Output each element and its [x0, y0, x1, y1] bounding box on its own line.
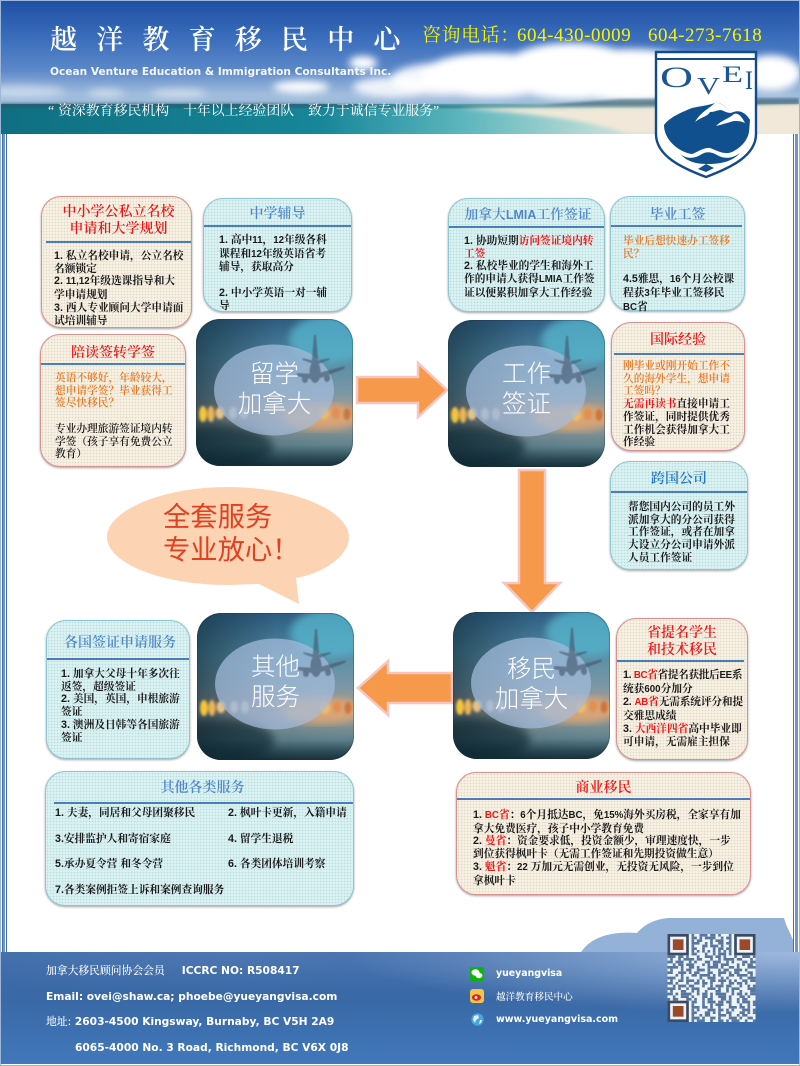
text: 证以便累积加拿大工作经验	[464, 287, 592, 299]
text: 2. 美国，英国，申根旅游	[61, 693, 180, 705]
company name: 越洋教育移民中心	[50, 25, 420, 55]
slogan: 致力于诚信专业服务”	[308, 104, 439, 119]
text: 教育）	[55, 448, 87, 460]
membership line: 加拿大移民顾问协会会员 ICCRC NO: R508417	[46, 963, 300, 978]
text: 3. 大西洋四省高中毕业即	[623, 723, 742, 735]
heading: 国际经验	[650, 333, 706, 348]
panel: provincial nominee	[616, 618, 748, 760]
text: 2. AB省无需系统评分和提	[623, 696, 743, 708]
heading: 中学辅导	[250, 207, 306, 222]
text: 6. 各类团体培训考察	[228, 858, 325, 870]
heading: 各国签证申请服务	[64, 636, 176, 651]
photo tile: other services: 其他	[251, 654, 300, 681]
logo shield: V	[697, 74, 721, 100]
text: 工作机会获得加拿大工	[623, 424, 730, 436]
text: 3. 魁省：22 万加元无需创业，无投资无风险，一步到位	[473, 861, 734, 873]
logo shield: E	[722, 62, 743, 87]
website: www.yueyangvisa.com	[496, 1014, 618, 1025]
panel: accompany visa	[40, 334, 186, 467]
text: 2. 曼省：资金要求低，投资金额少，审理速度快，一步	[473, 835, 731, 847]
header banner	[1, 1, 799, 134]
address 2: 6065-4000 No. 3 Road, Richmond, BC V6X 0J8	[75, 1041, 348, 1054]
phone numbers: 604-430-0009	[517, 25, 631, 46]
text	[54, 250, 184, 327]
text	[464, 234, 595, 299]
panel: international experience	[611, 322, 745, 451]
text: 2. 中小学英语一对一辅	[219, 287, 327, 299]
photo tile: work visa: 工作	[502, 361, 551, 388]
text: 1. 协助短期访问签证境内转	[464, 235, 593, 247]
text: 人员工作签证	[628, 552, 692, 564]
text: 专业办理旅游签证境内转	[55, 423, 173, 435]
photo tile: immigrate to Canada: 移民	[507, 656, 556, 683]
text: 课程和12年级英语省考	[219, 248, 326, 260]
icon: weibo	[470, 989, 484, 1003]
text: 可申请，无需雇主担保	[623, 736, 730, 748]
text: 拿大免费医疗，孩子中小学教育免费	[473, 823, 644, 835]
text: 英语不够好，年龄较大，	[55, 372, 173, 384]
text: 4. 留学生退税	[228, 833, 293, 845]
text: 民？	[623, 248, 644, 260]
text: 2. 枫叶卡更新，入籍申请	[228, 807, 347, 819]
text: 程获3年毕业工签移民	[623, 287, 725, 299]
text: 4.5雅思，16个月公校课	[623, 273, 734, 285]
heading: 和技术移民	[647, 643, 717, 658]
panel: graduate work permit	[610, 196, 745, 311]
text: 签尽快移民？	[55, 397, 119, 409]
logo shield: O	[660, 61, 693, 94]
text: BC省	[623, 301, 648, 313]
panel: business immigration	[456, 772, 751, 895]
photo tile: study in Canada	[196, 319, 353, 466]
arrow: left	[356, 658, 453, 718]
text: 统获600分加分	[623, 683, 693, 695]
text: 7.各类案例拒签上诉和案例查询服务	[55, 884, 224, 896]
text: 名额锁定	[54, 263, 97, 275]
text	[623, 360, 730, 448]
footer cloud	[581, 918, 793, 952]
photo tile: other services	[197, 613, 354, 760]
speech bubble	[107, 487, 349, 604]
photo tile: study in Canada: 留学	[250, 361, 299, 388]
photo tile: immigrate to Canada	[453, 612, 610, 759]
heading	[647, 624, 717, 658]
photo tile: work visa: 签证	[502, 391, 551, 418]
panel: school applications	[41, 196, 192, 328]
text: 试培训辅导	[54, 315, 107, 327]
panel: LMIA work visa	[448, 198, 605, 312]
text: 返签，超级签证	[61, 681, 136, 693]
text	[623, 234, 734, 313]
logo shield	[654, 50, 758, 178]
text: 工签	[464, 248, 485, 260]
address 1: 地址: 2603-4500 Kingsway, Burnaby, BC V5H 2A9	[46, 1014, 334, 1029]
slogan: 十年以上经验团队	[183, 104, 294, 119]
text: 到位获得枫叶卡（无需工作签证和先期投资做生意）	[473, 848, 719, 860]
text: 交雅思成绩	[623, 710, 676, 722]
text: 1. 加拿大父母十年多次往	[61, 668, 180, 680]
text: 签证	[61, 732, 82, 744]
wechat id: yueyangvisa	[496, 968, 562, 979]
heading: 毕业工签	[650, 208, 706, 223]
text: 作的申请人获得LMIA工作签	[464, 273, 595, 285]
photo tile: immigrate to Canada: 加拿大	[495, 686, 568, 713]
text: 3.安排监护人和寄宿家庭	[55, 833, 171, 845]
text: 毕业后想快速办工签移	[623, 235, 730, 247]
callout text: 专业放心！	[163, 534, 299, 565]
photo tile: work visa	[448, 320, 605, 467]
text	[55, 806, 224, 896]
banner photo: sky and beach	[1, 1, 799, 134]
text: 2. 私校毕业的学生和海外工	[464, 260, 593, 272]
text: 学签（孩子享有免费公立	[55, 436, 173, 448]
text: 1. BC省省提名获批后EE系	[623, 669, 742, 681]
phone numbers: 咨询电话：	[422, 25, 520, 46]
heading: 跨国公司	[651, 472, 707, 487]
text: 1. 高中11，12年级各科	[219, 234, 327, 246]
text: 1. 私立名校申请，公立名校	[54, 250, 183, 262]
heading: 加拿大LMIA工作签证	[464, 207, 592, 222]
panel: secondary tutoring	[203, 198, 352, 312]
email: Email: ovei@shaw.ca; phoebe@yueyangvisa.com	[46, 990, 337, 1003]
text: 学申请规划	[54, 289, 107, 301]
icon: wechat	[470, 967, 484, 981]
heading: 中小学公私立名校	[62, 205, 174, 220]
text: 签证	[61, 706, 82, 718]
photo tile: study in Canada: 加拿大	[238, 391, 311, 418]
arrow: right	[356, 360, 448, 420]
English company name: Ocean Venture Education & Immigration Consultants Inc.	[50, 66, 391, 78]
text	[228, 806, 347, 870]
text: 3. 澳洲及日韩等各国旅游	[61, 719, 180, 731]
text: 久的海外学生，想申请	[623, 373, 730, 385]
slogan	[48, 103, 439, 119]
text	[473, 808, 741, 887]
text: 3. 西人专业顾问大学申请面	[54, 302, 183, 314]
text: 作签证，同时提供优秀	[623, 411, 730, 423]
heading: 其他各类服务	[160, 781, 244, 796]
text: 2. 11,12年级选课指导和大	[54, 275, 175, 287]
heading: 陪读签转学签	[71, 346, 155, 361]
slogan: “	[48, 104, 54, 119]
text: 大设立分公司申请外派	[628, 539, 735, 551]
panel: multinational company	[610, 461, 748, 570]
text: 工签吗？	[623, 385, 666, 397]
text: 帮您国内公司的员工外	[628, 501, 735, 513]
text: 导	[219, 300, 230, 312]
text	[628, 500, 735, 564]
text	[219, 234, 327, 312]
callout text: 全套服务	[163, 501, 272, 532]
icon: globe	[471, 1013, 484, 1026]
text: 1. BC省：6个月抵达BC，免15%海外买房税，全家享有加	[473, 809, 741, 821]
panel: visa services	[46, 620, 190, 759]
heading	[62, 204, 174, 237]
text: 辅导，获取高分	[219, 261, 294, 273]
photo tile: other services: 服务	[251, 684, 300, 711]
text	[623, 668, 743, 748]
text	[55, 372, 173, 460]
footer contact text	[46, 963, 348, 1054]
heading: 省提名学生	[647, 626, 717, 641]
text: 工作签证，或者在加拿	[628, 526, 735, 538]
heading: 商业移民	[576, 781, 632, 796]
text: 派加拿大的分公司获得	[628, 514, 735, 526]
text: 想申请学签？毕业获得工	[55, 385, 173, 397]
text: 拿枫叶卡	[473, 875, 516, 887]
heading: 申请和大学规划	[70, 222, 168, 237]
phone numbers: 604-273-7618	[648, 25, 762, 46]
text: 1. 夫妻，同居和父母团聚移民	[55, 807, 195, 819]
phone numbers	[422, 24, 762, 46]
footer band	[1, 952, 799, 1064]
text: 刚毕业或刚开始工作不	[623, 360, 730, 372]
slogan: 资深教育移民机构	[58, 104, 169, 119]
panel: other services list	[45, 771, 354, 906]
text: 5.承办夏令营 和冬令营	[55, 858, 163, 870]
weibo name: 越洋教育移民中心	[496, 989, 573, 1003]
text: 无需再读书直接申请工	[623, 398, 730, 410]
arrow: down	[501, 468, 563, 612]
callout text	[163, 501, 299, 565]
QR code	[668, 934, 756, 1022]
text	[61, 668, 180, 744]
logo shield: I	[745, 66, 753, 95]
text: 作经验	[623, 436, 655, 448]
